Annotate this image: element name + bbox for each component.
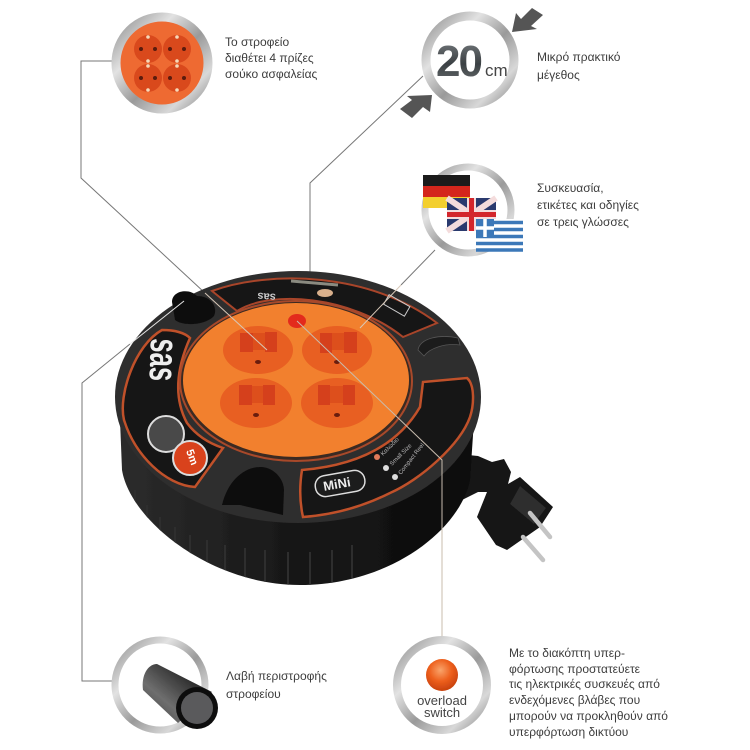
callout: four sockets (116, 17, 318, 109)
arrow: bottom left (400, 95, 432, 118)
cert logo (317, 289, 333, 297)
socket: bottom left (220, 378, 292, 428)
caption: υπερφόρτωση δικτύου (509, 725, 628, 739)
caption: μέγεθος (537, 68, 580, 82)
MINI text: MiNi (322, 474, 352, 494)
caption: μπορούν να προκληθούν από (509, 709, 668, 723)
feature bullets: Καλώδιο (380, 436, 401, 457)
icon: ring with orange ball (397, 640, 487, 730)
product: cable reel (115, 271, 553, 585)
caption: Με το διακόπτη υπερ- (509, 646, 625, 660)
badge: orange (173, 441, 207, 475)
MINI badge (314, 469, 367, 498)
black panel: sas branding (123, 330, 223, 487)
flag: Germany (423, 175, 470, 208)
leader line: languages callout (401, 250, 435, 285)
leader line: handle callout over the reel (130, 301, 184, 344)
socket: top right (302, 326, 372, 374)
caption: φόρτωσης προστατεύετε (509, 662, 641, 676)
leader line: sockets callout over the reel (205, 293, 267, 350)
socket: bottom right (301, 378, 373, 428)
feature bullets (374, 436, 426, 480)
icon: metal ring (425, 167, 511, 253)
caption: Συσκευασία, (537, 181, 604, 195)
rating label (384, 295, 410, 316)
black panel: MINI label (300, 378, 473, 517)
callout: size (400, 8, 621, 118)
icon: ring with cylinder handle (115, 640, 218, 730)
badge: grey (148, 416, 184, 452)
caption: τις ηλεκτρικές συσκευές από (509, 677, 660, 691)
rotation handle knob (172, 291, 215, 324)
carry notch (222, 467, 284, 515)
caption: σε τρεις γλώσσες (537, 215, 629, 229)
icon: metal ring with 20 cm (426, 16, 514, 104)
leader line: languages callout over the reel (360, 285, 401, 328)
feature bullets: Compact Reel (398, 443, 426, 476)
badge: orange: 5m (183, 448, 200, 467)
caption: διαθέτει 4 πρίζες (225, 51, 314, 65)
power plug (462, 455, 553, 560)
caption: σούκο ασφαλείας (225, 67, 318, 81)
black panel: top label (212, 278, 437, 337)
callout: overload switch (397, 640, 668, 739)
icon: sockets in metal ring (116, 17, 208, 109)
brand logo text: sas (140, 338, 187, 382)
callout: languages (423, 167, 639, 253)
infographic (80, 8, 668, 738)
caption: ενδεχόμενες βλάβες που (509, 693, 640, 707)
caption: Το στροφείο (225, 35, 289, 49)
top panel small print (291, 281, 338, 285)
caption: ετικέτες και οδηγίες (537, 198, 639, 212)
feature bullets: Small Size (389, 443, 414, 467)
leader line: handle callout (82, 344, 130, 681)
top panel text: sas (257, 290, 276, 303)
leader line: size callout (310, 76, 423, 272)
icon: ring with orange ball: overload (417, 693, 467, 708)
caption: Μικρό πρακτικό (537, 50, 621, 64)
leader line: sockets callout (81, 61, 205, 293)
callout: handle (115, 640, 327, 730)
caption: στροφείου (226, 687, 281, 701)
reel top face (115, 271, 481, 523)
caption: Λαβή περιστροφής (226, 669, 327, 683)
icon: metal ring with 20 cm: 20 (436, 37, 481, 86)
reel base with ribs (120, 420, 474, 585)
flag: UK (447, 198, 496, 231)
icon: ring with orange ball: switch (424, 705, 460, 720)
icon: metal ring with 20 cm: cm (485, 61, 508, 80)
groove (418, 336, 460, 356)
socket: top left (223, 326, 293, 374)
flag: Greece (476, 219, 523, 251)
orange socket disc (180, 301, 412, 461)
arrow: top right (512, 8, 543, 32)
leader line: overload switch callout (297, 321, 442, 640)
overload button (288, 314, 306, 328)
